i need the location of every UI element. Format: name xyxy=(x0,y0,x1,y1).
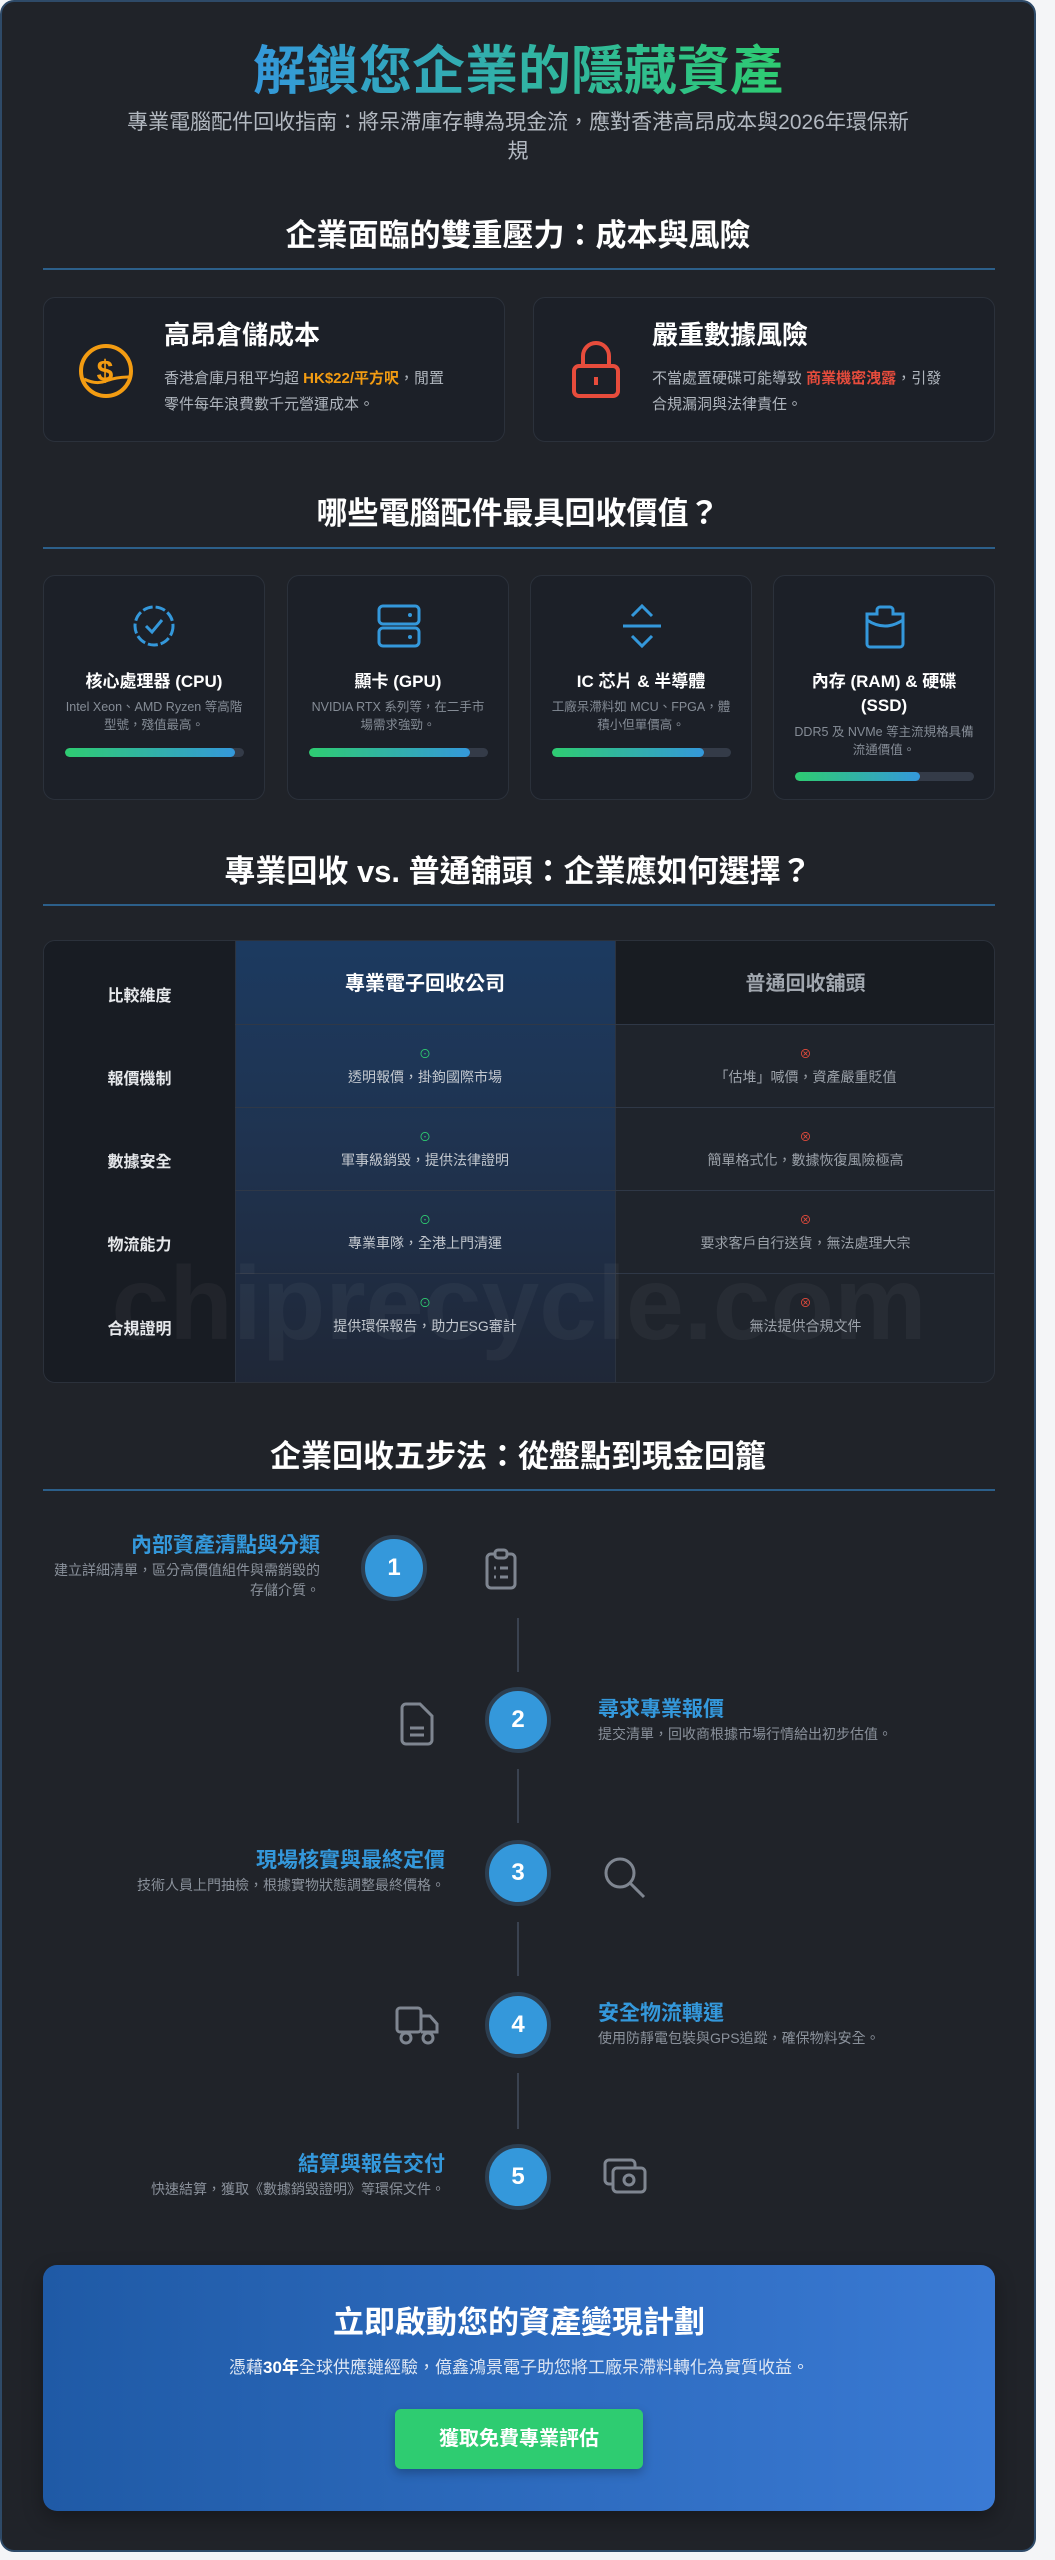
card title: 嚴重數據風險 xyxy=(652,320,808,350)
column: ordinary shop: ⊗ xyxy=(799,1296,812,1310)
step number xyxy=(485,1687,551,1753)
icon: truck xyxy=(396,2006,438,2044)
card desc: 工廠呆滯料如 MCU、FPGA，體積小但單價高。 xyxy=(552,700,730,732)
icon: cpu xyxy=(134,606,174,646)
step text: 內部資產清點與分類 xyxy=(131,1534,320,1557)
column labels: 數據安全 xyxy=(107,1154,172,1171)
cta title: 立即啟動您的資產變現計劃 xyxy=(333,2305,705,2340)
step 1 xyxy=(54,1534,516,1601)
step text: 快速結算，獲取《數據銷毀證明》等環保文件。 xyxy=(151,2181,445,2197)
column: ordinary shop: ⊗ xyxy=(799,1213,812,1227)
step number xyxy=(361,1535,427,1601)
column: professional: ⊙ xyxy=(419,1213,431,1227)
column: professional: 透明報價，掛鉤國際市場 xyxy=(348,1069,502,1085)
step text: 尋求專業報價 xyxy=(598,1698,724,1721)
step text xyxy=(54,1534,320,1598)
column labels xyxy=(107,987,172,1338)
step text: 使用防靜電包裝與GPS追蹤，確保物料安全。 xyxy=(598,2030,880,2046)
step number: 3 xyxy=(511,1859,525,1886)
progress bar xyxy=(65,748,244,757)
column: professional: 軍事級銷毀，提供法律證明 xyxy=(341,1152,509,1168)
column: professional: 提供環保報告，助力ESG審計 xyxy=(333,1318,517,1334)
panel: IC card xyxy=(530,575,752,800)
icon: document xyxy=(400,1702,434,1746)
progress bar xyxy=(552,748,731,757)
column: ordinary shop: 簡單格式化，數據恢復風險極高 xyxy=(708,1152,904,1168)
panel: call to action xyxy=(43,2265,995,2511)
step number xyxy=(485,1992,551,2058)
step text: 建立詳細清單，區分高價值組件與需銷毀的存儲介質。 xyxy=(54,1562,320,1598)
column: professional: ⊙ xyxy=(419,1047,431,1061)
column labels: 比較維度 xyxy=(107,988,172,1005)
column: ordinary shop: 無法提供合規文件 xyxy=(750,1318,862,1334)
card title: 核心處理器 (CPU) xyxy=(86,672,222,691)
cta button xyxy=(395,2409,643,2469)
step text: 結算與報告交付 xyxy=(298,2153,445,2176)
column: ordinary shop: ⊗ xyxy=(799,1130,812,1144)
step 5 xyxy=(151,2144,646,2210)
panel: RAM SSD card xyxy=(773,575,995,800)
card desc: Intel Xeon、AMD Ryzen 等高階型號，殘值最高。 xyxy=(66,700,242,732)
step number: 5 xyxy=(511,2163,525,2190)
step text xyxy=(598,2002,880,2046)
cta button: 獲取免費專業評估 xyxy=(439,2428,599,2450)
column labels: 物流能力 xyxy=(107,1237,172,1254)
icon: dollar xyxy=(79,344,133,398)
progress bar xyxy=(795,772,974,781)
icon: storage xyxy=(866,606,904,648)
column: professional: ⊙ xyxy=(419,1296,431,1310)
heading: components: 哪些電腦配件最具回收價值？ xyxy=(316,496,720,531)
card text: 香港倉庫月租平均超 HK$22/平方呎，閒置零件每年浪費數千元營運成本。 xyxy=(164,370,444,413)
column: professional xyxy=(333,972,517,1334)
comparison table xyxy=(43,940,995,1383)
title: 解鎖您企業的隱藏資產 xyxy=(253,42,783,101)
step number: 2 xyxy=(511,1706,525,1733)
subtitle: 專業電腦配件回收指南：將呆滯庫存轉為現金流，應對香港高昂成本與2026年環保新規 xyxy=(127,111,909,163)
column: ordinary shop xyxy=(700,972,910,1334)
card title: 顯卡 (GPU) xyxy=(355,672,441,691)
column labels: 報價機制 xyxy=(107,1071,172,1088)
card title: 內存 (RAM) & 硬碟 (SSD) xyxy=(812,672,956,715)
column: ordinary shop: 要求客戶自行送貨，無法處理大宗 xyxy=(700,1235,910,1251)
step text xyxy=(598,1698,892,1742)
icon: gpu xyxy=(378,604,420,648)
step number xyxy=(485,1840,551,1906)
heading: five steps: 企業回收五步法：從盤點到現金回籠 xyxy=(270,1439,766,1474)
icon: lock xyxy=(572,341,620,398)
step text: 現場核實與最終定價 xyxy=(256,1849,445,1872)
column labels: 合規證明 xyxy=(107,1321,172,1338)
panel: data risk card xyxy=(533,297,995,442)
card desc: DDR5 及 NVMe 等主流規格具備流通價值。 xyxy=(794,725,974,757)
step number xyxy=(485,2144,551,2210)
step text: 技術人員上門抽檢，根據實物狀態調整最終價格。 xyxy=(137,1877,445,1893)
step text xyxy=(137,1848,445,1893)
column: professional: 專業車隊，全港上門清運 xyxy=(348,1235,502,1251)
step text: 提交清單，回收商根據市場行情給出初步估值。 xyxy=(598,1726,892,1742)
card text: 不當處置硬碟可能導致 商業機密洩露，引發合規漏洞與法律責任。 xyxy=(652,370,941,413)
icon: cash xyxy=(604,2158,646,2194)
step text: 安全物流轉運 xyxy=(598,2002,724,2025)
step 4 xyxy=(396,1992,880,2058)
panel: CPU card xyxy=(43,575,265,800)
icon: clipboard xyxy=(486,1548,516,1590)
step 3 xyxy=(137,1840,645,1906)
card title: IC 芯片 & 半導體 xyxy=(577,672,705,691)
step number: 4 xyxy=(511,2011,525,2038)
step number: 1 xyxy=(387,1554,401,1581)
step 2 xyxy=(400,1687,892,1753)
icon: dollar: $ xyxy=(97,355,114,388)
column: ordinary shop: 普通回收舖頭 xyxy=(746,973,866,995)
column: professional: 專業電子回收公司 xyxy=(345,973,505,995)
icon: magnifier xyxy=(604,1858,645,1898)
card desc: NVIDIA RTX 系列等，在二手市場需求強勁。 xyxy=(312,700,484,732)
cta text: 憑藉30年全球供應鏈經驗，億鑫鴻景電子助您將工廠呆滯料轉化為實質收益。 xyxy=(229,2358,809,2377)
column: ordinary shop: ⊗ xyxy=(799,1047,812,1061)
heading: comparison: 專業回收 vs. 普通舖頭：企業應如何選擇？ xyxy=(224,854,812,889)
panel: GPU card xyxy=(287,575,509,800)
column: professional: ⊙ xyxy=(419,1130,431,1144)
icon: ic chip xyxy=(623,604,661,648)
panel: storage cost card xyxy=(43,297,505,442)
watermark: chiprecycle.com xyxy=(111,1246,927,1362)
step text xyxy=(151,2152,445,2197)
heading: dual pressure: 企業面臨的雙重壓力：成本與風險 xyxy=(286,218,750,253)
progress bar xyxy=(309,748,488,757)
column: ordinary shop: 「估堆」喊價，資產嚴重貶值 xyxy=(714,1069,896,1085)
card title: 高昂倉儲成本 xyxy=(164,320,320,350)
